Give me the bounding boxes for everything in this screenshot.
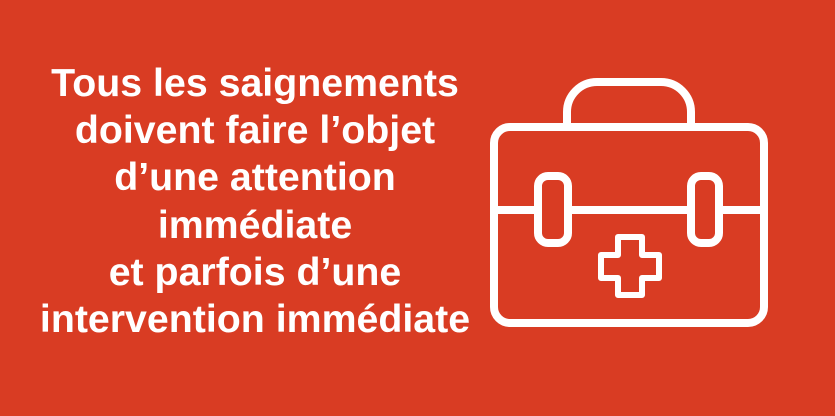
- title text: d’une attention: [114, 155, 396, 199]
- title text: doivent faire l’objet: [75, 108, 435, 152]
- title text: immédiate: [158, 203, 352, 247]
- title text: [40, 61, 470, 341]
- title text: et parfois d’une: [109, 250, 401, 294]
- title text: intervention immédiate: [40, 297, 470, 341]
- title text: Tous les saignements: [51, 61, 459, 105]
